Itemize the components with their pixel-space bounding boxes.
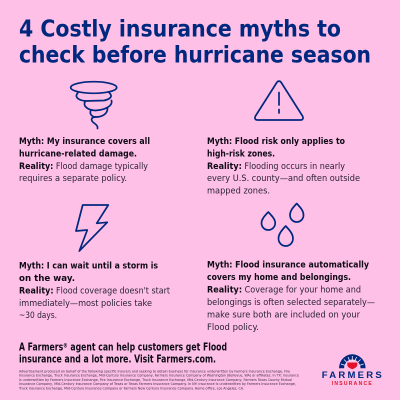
logo: Farmers Insurance: INSURANCE xyxy=(332,381,372,387)
icon: water drops xyxy=(262,204,304,246)
myth 4 text: Flood policy. xyxy=(207,323,259,333)
fine print: Insurance Exchange, Truck Insurance Exchange, Mid-Century Insurance Company, Farmers Insurance Company of Washington (Bellevue, WA) or affiliates. In TX: insurance xyxy=(19,374,299,378)
myth 3 text xyxy=(19,262,170,321)
myth 1 text xyxy=(19,137,150,184)
myth 4 text: belongings is often selected separately— xyxy=(207,298,375,308)
icon: lightning bolt xyxy=(76,205,108,251)
myth 3 text: Reality: Flood coverage doesn't start xyxy=(19,286,170,296)
fine print: Insurance Company, Mid-Century Insurance Company of Texas or Texas Farmers Insurance Company. In NY: insurance is underwritten by Farmers Insurance Exchange, xyxy=(19,382,296,386)
logo emblem xyxy=(339,354,366,369)
panel: myth 3 xyxy=(19,205,170,321)
icon: warning triangle xyxy=(255,81,303,120)
myth 1 text: Reality: Flood damage typically xyxy=(19,162,149,172)
myth 1 text: Myth: My insurance covers all xyxy=(19,137,150,147)
panel: myth 1 xyxy=(19,82,150,184)
title: 4 Costly insurance myths to xyxy=(19,16,341,42)
call to action: A Farmers xyxy=(19,343,77,354)
fine print: Truck Insurance Exchange, Mid-Century Insurance Company or Farmers New Century Insurance Company. Home office, Los Angeles, CA. xyxy=(18,386,244,390)
fine print: is underwritten by Farmers Insurance Exchange, Fire Insurance Exchange, Truck Insurance Exchange, Mid-Century Insurance Company, Farmers Texas County Mutual xyxy=(19,378,292,382)
myth 3 text: immediately—most policies take xyxy=(19,299,152,309)
logo: Farmers Insurance: FARMERS xyxy=(322,370,382,381)
myth 4 text: covers my home and belongings. xyxy=(207,273,351,283)
myth 1 text: hurricane-related damage. xyxy=(19,150,137,160)
myth 4 text: Myth: Flood insurance automatically xyxy=(207,261,369,271)
myth 3 text: on the way. xyxy=(19,274,75,284)
panel: myth 4 xyxy=(207,204,375,333)
myth 2 text: Reality: Flooding occurs in nearly xyxy=(207,162,346,172)
panel: myth 2 xyxy=(207,81,360,196)
myth 3 text: ~30 days. xyxy=(19,311,57,321)
myth 3 text: Myth: I can wait until a storm is xyxy=(19,262,158,272)
myth 1 text: requires a separate policy. xyxy=(19,174,127,184)
myth 2 text: high-risk zones. xyxy=(207,150,275,160)
icon: tornado xyxy=(71,82,117,128)
myth 4 text: make sure both are included on your xyxy=(207,310,360,320)
myth 2 text: every U.S. county—and often outside xyxy=(207,174,360,184)
call to action: insurance and a lot more. Visit Farmers.com. xyxy=(19,354,216,366)
fine print: Advertisement produced on behalf of the following specific insurers and seeking to obtain business for insurance underwritten by Farmers Insurance Exchange, Fire xyxy=(19,370,290,374)
call to action xyxy=(19,343,227,366)
title xyxy=(19,16,371,69)
logo: Farmers Insurance xyxy=(322,354,382,387)
myth 2 text xyxy=(207,137,360,196)
call to action: ® xyxy=(63,343,68,350)
myth 2 text: mapped zones. xyxy=(207,186,270,196)
fine print xyxy=(18,370,299,390)
myth 2 text: Myth: Flood risk only applies to xyxy=(207,137,345,147)
call to action: agent can help customers get Flood xyxy=(68,343,227,354)
myth 4 text xyxy=(207,261,375,333)
myth 4 text: Reality: Coverage for your home and xyxy=(207,286,361,296)
